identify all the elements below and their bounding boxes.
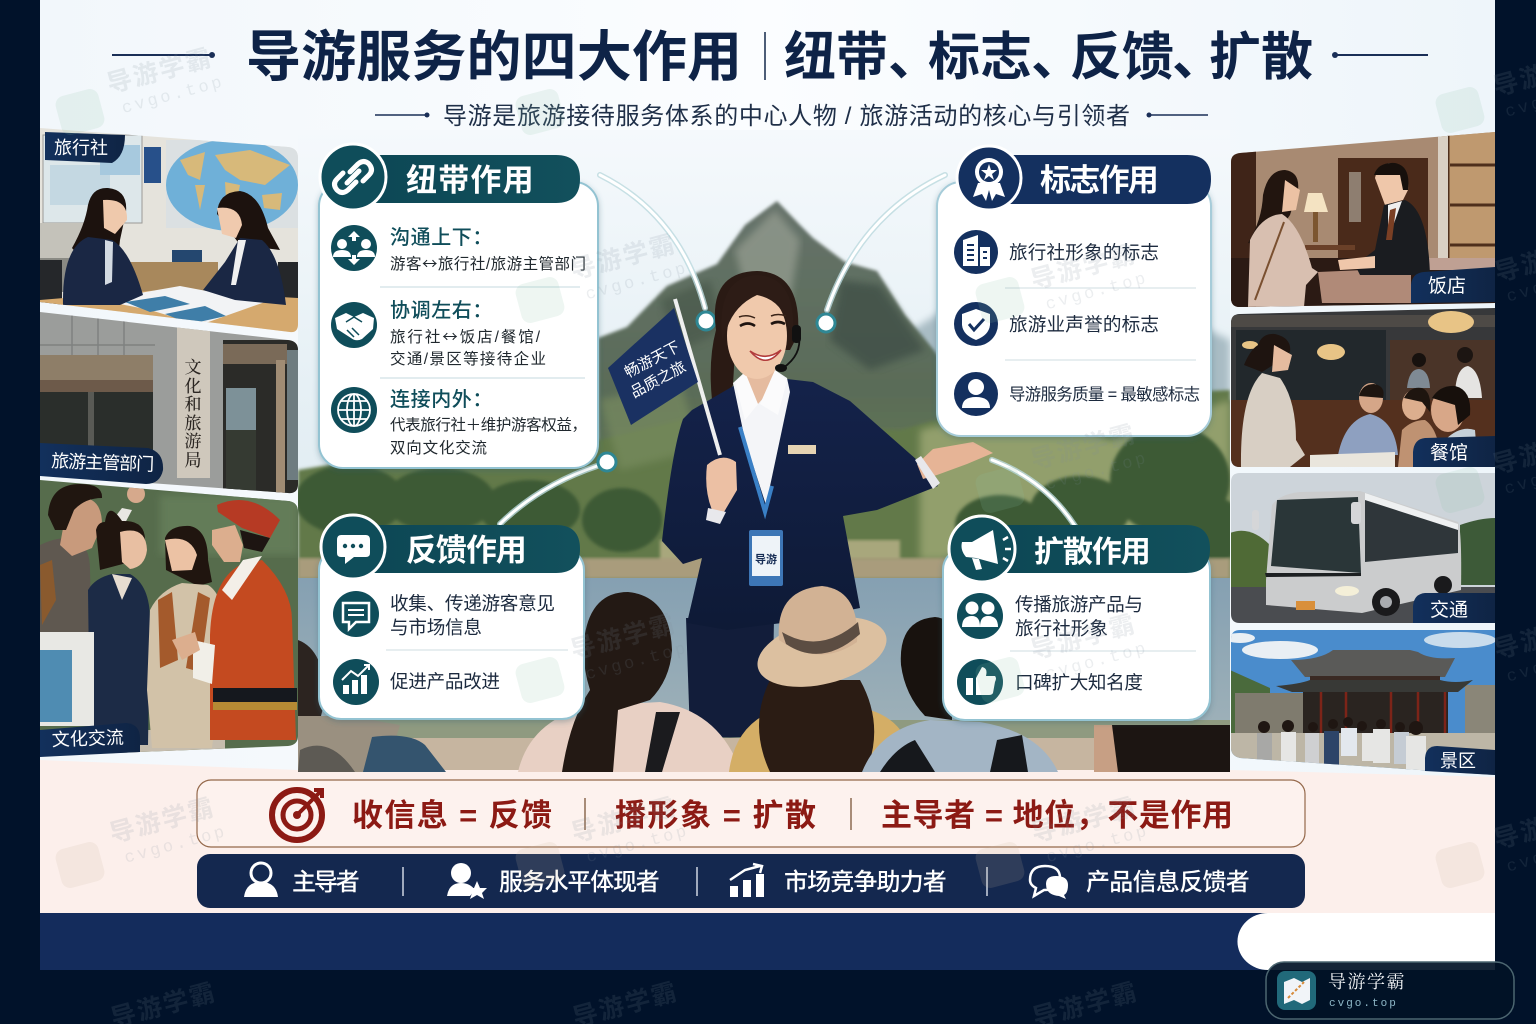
- man with glasses and backpack: [862, 617, 1058, 772]
- man in grey shirt: [40, 484, 102, 632]
- photo: cultural exchange: [40, 480, 298, 760]
- item: 协调左右: 协调左右：: [390, 299, 493, 322]
- role: 主导者: 主导者: [292, 869, 360, 896]
- photo label: tourism authority: [40, 443, 163, 484]
- title: 导游服务的四大作用: [246, 26, 742, 88]
- logo badge: [1266, 962, 1514, 1019]
- watermarks: cvgo.top: [584, 639, 691, 685]
- item: 协调左右: [331, 299, 546, 368]
- item: 收集传递: [333, 591, 555, 638]
- photo label: transport: 交通: [1430, 599, 1468, 621]
- watermarks: cvgo.top: [585, 822, 692, 868]
- photo label: transport: [1413, 593, 1495, 623]
- header ribbon: 反馈作用: [406, 533, 528, 568]
- left cuff: [706, 508, 726, 524]
- role: 服务水平体现者: [447, 863, 660, 899]
- headset parts: [775, 325, 801, 372]
- role: 产品信息反馈者: 产品信息反馈者: [1086, 869, 1250, 896]
- icon: map logo: [1277, 971, 1316, 1010]
- diners: [1338, 383, 1478, 467]
- id badge: 导游: [755, 552, 777, 566]
- temple: [1276, 650, 1473, 736]
- woman with sun hat: [729, 586, 916, 772]
- photo: scenic spot gate: [1225, 630, 1496, 778]
- title: 反馈: [1070, 29, 1174, 87]
- bureau sign: 旅: [184, 414, 202, 433]
- restaurant guest: [1241, 334, 1305, 467]
- collar: [735, 370, 787, 420]
- photo label: travel agency: [45, 132, 125, 163]
- watermarks: cvgo.top: [120, 73, 227, 119]
- hotel guest: [1248, 170, 1318, 307]
- role: 市场竞争助力者: [730, 864, 947, 897]
- watermarks: cvgo.top: [584, 259, 691, 305]
- flag: [608, 308, 698, 425]
- watermarks: cvgo.top: [1044, 449, 1151, 495]
- title: 扩散: [1209, 29, 1313, 87]
- world map: [166, 139, 298, 231]
- watermarks: 导游学霸: [1028, 240, 1139, 295]
- role: 服务水平体现者: 服务水平体现者: [499, 869, 660, 896]
- item: 收集传递: 与市场信息: [390, 617, 482, 638]
- icon: chain link: [320, 144, 386, 210]
- item: 连接内外: 双向文化交流: [390, 439, 487, 457]
- flag: 品质之旅: [628, 358, 689, 402]
- title: 、: [1031, 29, 1083, 87]
- photo: coach bus: [1230, 473, 1495, 625]
- key points strip: [197, 780, 1305, 847]
- watermarks: 导游学霸: [1028, 610, 1139, 665]
- icon: megaphone: [949, 516, 1015, 582]
- key points strip: 播形象 = 扩散: [615, 798, 816, 833]
- logo badge: cvgo.top: [1329, 998, 1398, 1010]
- watermarks: cvgo.top: [123, 823, 230, 869]
- item: 连接内外: 连接内外：: [390, 388, 493, 411]
- name tag: [788, 445, 816, 454]
- desk lamp: [1304, 193, 1328, 242]
- item: 传播旅游产品: 旅行社形象: [1015, 618, 1108, 639]
- photo: restaurant: [1230, 305, 1495, 470]
- agency staff right: [203, 191, 286, 305]
- title decoration left: [112, 52, 215, 58]
- watermarks: cvgo.top: [1045, 822, 1152, 868]
- hair top: [721, 275, 793, 340]
- hills and walls: [1231, 670, 1495, 733]
- item: 口碑扩大知名度: [957, 659, 1143, 705]
- pointing arm hand: [917, 442, 993, 479]
- watermarks: 导游学霸: [568, 230, 679, 285]
- header ribbon: 标志作用: [1040, 163, 1160, 198]
- subtitle: 导游是旅游接待服务体系的中心人物 / 旅游活动的核心与引领者: [443, 103, 1130, 130]
- bureau sign: 和: [184, 395, 202, 414]
- item: 导游服务质量: 导游服务质量 = 最敏感标志: [1009, 386, 1200, 404]
- connector dots: [598, 312, 835, 471]
- watermarks: 导游学霸: [1028, 420, 1139, 475]
- role: 主导者: [244, 863, 360, 897]
- item: 促进产品改进: [333, 659, 500, 705]
- role: 产品信息反馈者: [1030, 866, 1250, 899]
- item: 旅行社形象的标志: 旅行社形象的标志: [1009, 242, 1159, 263]
- photo: tourism bureau building: [40, 312, 298, 497]
- desk: [40, 290, 298, 335]
- guide figure: [608, 271, 993, 738]
- role: 市场竞争助力者: 市场竞争助力者: [784, 869, 947, 896]
- item: 收集传递: 收集、传递游客意见: [390, 593, 555, 614]
- shelf: [40, 223, 84, 292]
- item: 旅游业声誉的标志: [954, 302, 1159, 346]
- neck: [743, 362, 775, 404]
- hotel staff: [1338, 163, 1430, 275]
- raised hand: [117, 488, 145, 522]
- item: 旅行社形象的标志: [954, 230, 1159, 274]
- watermarks: cvgo.top: [1044, 269, 1151, 315]
- photo: travel agency: [40, 128, 298, 335]
- photo label: tourism authority: 旅游主管部门: [51, 451, 154, 475]
- photo label: scenic spot: [1425, 746, 1495, 775]
- title decoration right: [1332, 52, 1428, 58]
- panel: 扩散作用: [943, 516, 1210, 720]
- ponytail and hair back: [711, 271, 798, 400]
- wall map: [43, 135, 142, 223]
- bureau sign: 化: [184, 377, 202, 396]
- title: 、: [888, 29, 940, 87]
- panel: 反馈作用: [319, 515, 584, 719]
- roles bar: [197, 854, 1305, 908]
- watermarks: 导游学霸: [1029, 793, 1140, 848]
- photo label: scenic spot: 景区: [1440, 751, 1476, 771]
- key points strip: 主导者 = 地位，不是作用: [881, 798, 1233, 833]
- photo label: restaurant: 餐馆: [1430, 442, 1468, 464]
- flag pole: [675, 299, 720, 455]
- tourist woman left: [518, 592, 741, 772]
- photo label: hotel: [1411, 267, 1495, 303]
- header ribbon: 扩散作用: [1034, 536, 1152, 569]
- man in red costume: [172, 500, 297, 740]
- flag: 畅游天下: [622, 338, 683, 382]
- suit jacket: [662, 379, 938, 630]
- watermarks: 导游学霸: [568, 610, 679, 665]
- item: 沟通上下: [331, 225, 586, 274]
- tourists group: [1257, 717, 1426, 770]
- item: 连接内外: 代表旅行社＋维护游客权益，: [390, 416, 587, 434]
- far-left tourist: [298, 640, 446, 772]
- item: 协调左右: 交通/景区等接待企业: [390, 350, 546, 368]
- pendant lamps: [1242, 311, 1474, 360]
- header ribbon: 纽带作用: [406, 163, 535, 198]
- background scene: mountain, trees and lake: [295, 130, 1245, 772]
- bureau sign: [177, 327, 210, 478]
- header ribbon: [355, 155, 580, 203]
- icon: target: [272, 790, 322, 840]
- bureau sign: 游: [184, 432, 202, 451]
- panel: 纽带作用: [319, 144, 598, 468]
- photo label: hotel: 饭店: [1428, 275, 1466, 297]
- watermarks: 导游学霸: [104, 44, 216, 99]
- shirt: [733, 370, 790, 505]
- watermarks: 导游学霸: [569, 793, 680, 848]
- item: 旅游业声誉的标志: 旅游业声誉的标志: [1009, 314, 1159, 335]
- bus: [1252, 491, 1461, 616]
- cuff: [915, 456, 940, 489]
- woman in navy: [88, 511, 150, 745]
- bottom navy band: [40, 913, 1495, 970]
- photo: hotel: [1230, 130, 1495, 307]
- item: 沟通上下: 游客↔旅行社/旅游主管部门: [390, 252, 586, 274]
- bottom pink band: [40, 760, 1495, 913]
- title: 纽带: [784, 29, 888, 87]
- title: 标志: [928, 29, 1032, 87]
- curved connector lines: [500, 175, 1075, 526]
- header ribbon: [985, 155, 1211, 204]
- item: 传播旅游产品: 传播旅游产品与: [1015, 594, 1143, 615]
- item: 促进产品改进: 促进产品改进: [390, 671, 500, 692]
- header ribbon: [985, 525, 1210, 573]
- background staff: [1407, 353, 1430, 388]
- title: 、: [1172, 29, 1224, 87]
- logo badge: 导游学霸: [1328, 972, 1406, 992]
- bureau sign: 局: [184, 451, 202, 470]
- holding hand: [706, 458, 737, 512]
- watermarks: 导游学霸: [107, 793, 218, 848]
- woman in vest: [147, 526, 217, 748]
- item: 连接内外: [331, 387, 587, 457]
- icon: speech bubble: [321, 515, 385, 579]
- table dishes: [1310, 452, 1395, 467]
- skirt: [686, 618, 774, 738]
- key points strip: 收信息 = 反馈: [352, 798, 552, 833]
- item: 传播旅游产品: [957, 593, 1143, 639]
- item: 口碑扩大知名度: 口碑扩大知名度: [1015, 672, 1143, 693]
- item: 导游服务质量: [954, 372, 1200, 416]
- photo label: restaurant: [1413, 436, 1495, 467]
- photo label: cultural exchange: 文化交流: [51, 727, 124, 750]
- far-right tourist: [1094, 725, 1230, 772]
- face: [727, 293, 787, 379]
- title: [246, 26, 1313, 88]
- lanyard: [740, 427, 772, 512]
- facial features: [739, 314, 786, 360]
- headset mic: [783, 335, 799, 368]
- panel: 标志作用: [937, 146, 1211, 436]
- header ribbon: [355, 525, 580, 573]
- audience: back-view tourists: [298, 586, 1230, 772]
- bureau sign: 文: [184, 358, 202, 377]
- agency staff left: [63, 188, 143, 305]
- watermarks: cvgo.top: [1044, 639, 1151, 685]
- icon: medal badge: [957, 146, 1021, 210]
- photo label: travel agency: 旅行社: [54, 138, 108, 158]
- item: 协调左右: 旅行社↔饭店/餐馆/: [390, 325, 541, 347]
- brochure: [40, 632, 94, 726]
- item: 沟通上下: 沟通上下：: [390, 226, 493, 249]
- id badge: [749, 530, 783, 586]
- photo label: cultural exchange: [40, 723, 140, 757]
- waiter: [1455, 347, 1482, 398]
